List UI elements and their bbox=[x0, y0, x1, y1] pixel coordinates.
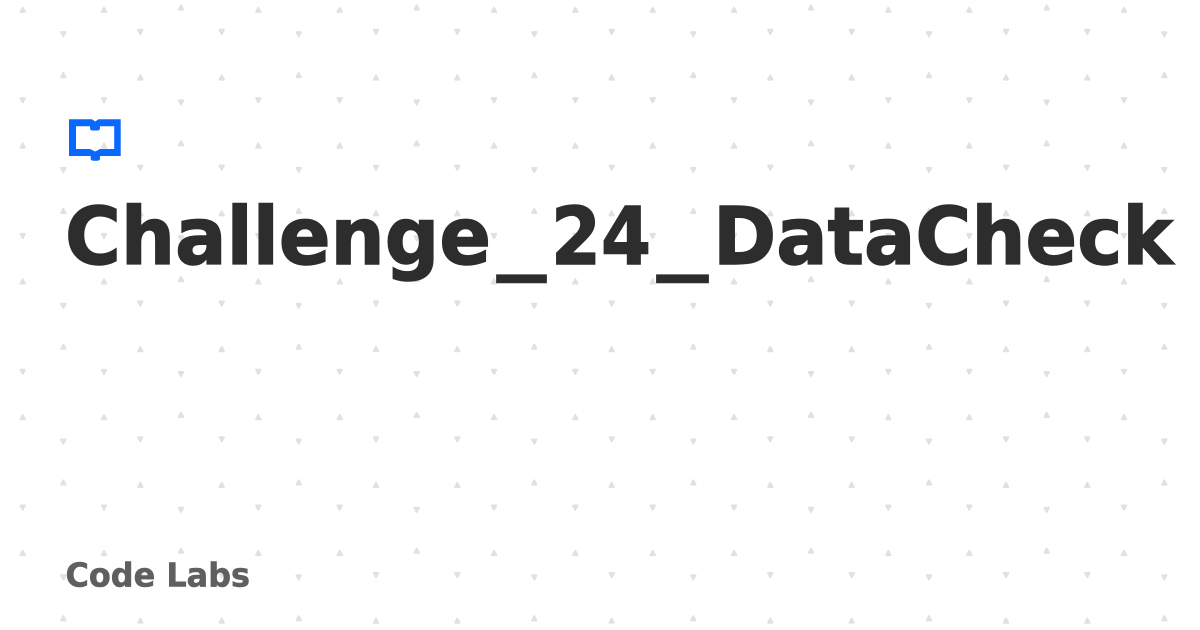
title: Challenge bbox=[65, 191, 491, 283]
title: _ bbox=[497, 191, 547, 283]
title: 24 bbox=[551, 191, 651, 283]
title: DataCheck bbox=[713, 191, 1175, 283]
icon: open book bbox=[69, 119, 121, 161]
author name: Code Labs bbox=[66, 556, 250, 594]
title: _ bbox=[657, 191, 709, 283]
